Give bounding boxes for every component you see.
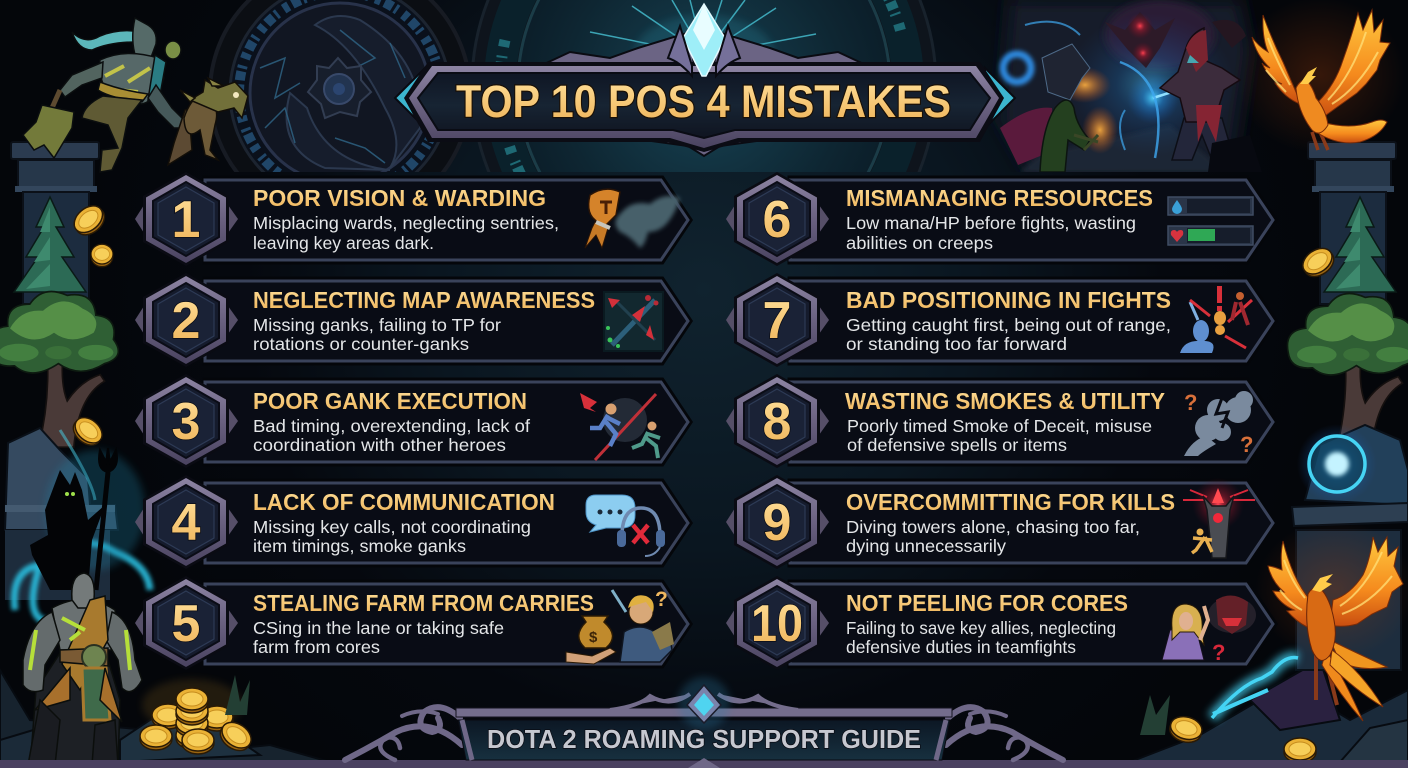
mistake 10 row: defensive duties in teamfights xyxy=(846,637,1076,657)
mistake 8 row xyxy=(726,374,1275,468)
mistake 10 row xyxy=(726,576,1275,670)
crystal gem xyxy=(668,4,740,76)
title banner xyxy=(395,32,1015,156)
mistake 6 row: abilities on creeps xyxy=(846,233,993,253)
mistake 1 row xyxy=(135,172,690,266)
footer text: DOTA 2 ROAMING SUPPORT GUIDE xyxy=(487,724,921,754)
description 8: Poorly timed Smoke of Deceit, misuse xyxy=(847,416,1152,436)
left rune shield xyxy=(208,0,468,172)
gold coin stack xyxy=(140,679,256,756)
mistake 3 row xyxy=(135,374,690,468)
heading 8: WASTING SMOKES & UTILITY xyxy=(845,388,1165,414)
battle scene xyxy=(1000,0,1262,172)
description 6: Low mana/HP before fights, wasting xyxy=(846,213,1136,233)
heading 9: OVERCOMMITTING FOR KILLS xyxy=(846,489,1175,515)
mistake 6 row xyxy=(726,172,1275,266)
bottom frame line xyxy=(0,760,1408,768)
left trees xyxy=(0,197,118,447)
heading 7: BAD POSITIONING IN FIGHTS xyxy=(846,287,1171,313)
description 10: Failing to save key allies, neglecting xyxy=(846,618,1116,638)
footer gem xyxy=(678,677,730,729)
number 5: 5 xyxy=(172,595,200,653)
icon: minimap xyxy=(604,292,663,351)
number 8: 8 xyxy=(763,393,791,451)
number 3: 3 xyxy=(172,393,200,451)
mistake 8 row: of defensive spells or items xyxy=(847,435,1067,455)
silhouette hero with staff xyxy=(14,448,150,622)
stone titan hero xyxy=(23,18,186,172)
gem light rays xyxy=(590,0,816,95)
mistake 2 row xyxy=(135,273,690,367)
grass tufts xyxy=(225,675,1170,735)
heading 6: MISMANAGING RESOURCES xyxy=(846,185,1153,211)
number 10: 10 xyxy=(751,595,803,653)
blue lightning xyxy=(1212,658,1298,718)
icon: money bag and hero: ? xyxy=(655,588,668,611)
heading 4: LACK OF COMMUNICATION xyxy=(253,489,555,515)
number 1: 1 xyxy=(172,191,200,249)
green hero in battle xyxy=(1000,100,1098,172)
coins left xyxy=(68,201,113,450)
icon: speech bubble and headset xyxy=(586,495,665,556)
icon: mana and health bars xyxy=(1168,197,1253,245)
banner crest xyxy=(540,32,868,66)
ground rocks xyxy=(0,660,1408,762)
footer plate xyxy=(458,720,950,760)
number 7: 7 xyxy=(763,292,791,350)
goblin creature xyxy=(168,78,248,165)
icon: panicking ally and demon: ? xyxy=(1212,640,1225,665)
description 5: CSing in the lane or taking safe xyxy=(253,618,504,638)
number 2: 2 xyxy=(172,292,200,350)
footer scrollwork xyxy=(345,707,1063,760)
icon: caught out of position xyxy=(1180,286,1252,353)
mistake 9 row xyxy=(726,475,1275,569)
mistake 5 row: farm from cores xyxy=(253,637,380,657)
icon: panicking ally and demon xyxy=(1162,595,1256,665)
side teal tips xyxy=(395,68,1015,128)
icon: tower dive xyxy=(1183,478,1255,558)
icon: money bag and hero: $ xyxy=(589,629,598,646)
description 3: Bad timing, overextending, lack of xyxy=(253,416,530,436)
mistake 7 row xyxy=(726,273,1275,367)
number 9: 9 xyxy=(763,494,791,552)
mistake 9 row: dying unnecessarily xyxy=(846,536,1006,556)
description 4: Missing key calls, not coordinating xyxy=(253,517,531,537)
description 1: Misplacing wards, neglecting sentries, xyxy=(253,213,559,233)
number 6: 6 xyxy=(763,191,791,249)
left stone block xyxy=(5,428,118,600)
left pillar xyxy=(11,142,99,304)
title text: TOP 10 POS 4 MISTAKES xyxy=(456,76,951,127)
heading 3: POOR GANK EXECUTION xyxy=(253,388,527,414)
mistake 7 row: or standing too far forward xyxy=(846,334,1067,354)
icon: ward and smoke xyxy=(585,189,680,248)
icon: fizzled smoke xyxy=(1184,390,1253,457)
mistake 4 row: item timings, smoke ganks xyxy=(253,536,466,556)
muscular hero xyxy=(23,573,142,768)
mistake 4 row xyxy=(135,475,690,569)
footer ornament xyxy=(345,677,1063,768)
mistake 5 row xyxy=(135,576,690,670)
heading 2: NEGLECTING MAP AWARENESS xyxy=(253,287,595,313)
heading 10: NOT PEELING FOR CORES xyxy=(846,590,1128,616)
heading 5: STEALING FARM FROM CARRIES xyxy=(253,590,594,616)
right stone block and arcane orb xyxy=(1292,424,1408,670)
description 2: Missing ganks, failing to TP for xyxy=(253,315,501,335)
icon: money bag and hero xyxy=(566,588,674,664)
heading 1: POOR VISION & WARDING xyxy=(253,185,546,211)
banner plate xyxy=(404,62,1004,152)
icon: failed gank xyxy=(580,393,660,460)
coins right bottom xyxy=(1167,713,1316,763)
description 7: Getting caught first, being out of range, xyxy=(846,315,1171,335)
mistake 2 row: rotations or counter-ganks xyxy=(253,334,469,354)
top phoenix xyxy=(1235,0,1405,153)
mistake 3 row: coordination with other heroes xyxy=(253,435,506,455)
icon: fizzled smoke: ? xyxy=(1240,432,1253,457)
coin right xyxy=(1298,243,1339,282)
description 9: Diving towers alone, chasing too far, xyxy=(846,517,1140,537)
number 4: 4 xyxy=(172,494,201,552)
right pillar xyxy=(1308,142,1396,304)
red mage in battle xyxy=(1160,20,1246,160)
icon: fizzled smoke: ? xyxy=(1184,390,1197,415)
mistake 1 row: leaving key areas dark. xyxy=(253,233,434,253)
top centre rune ring xyxy=(472,0,936,172)
bottom phoenix xyxy=(1255,520,1408,721)
right trees xyxy=(1287,197,1408,449)
